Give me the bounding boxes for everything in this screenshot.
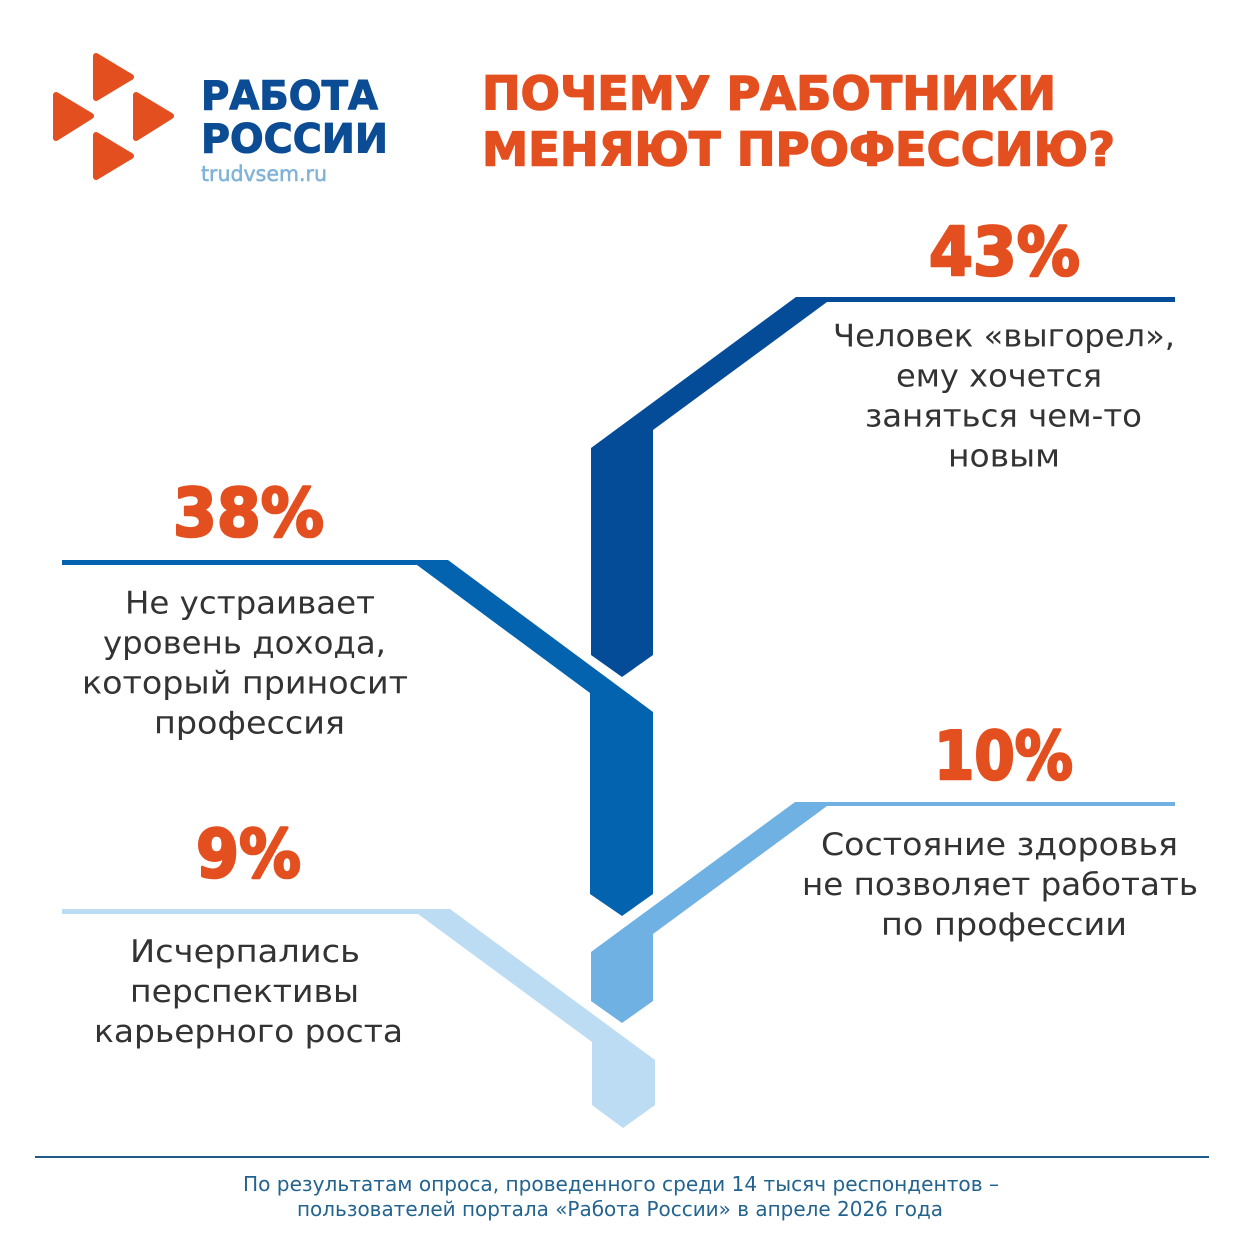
title	[482, 66, 1115, 176]
text: 10%: Состояние здоровья	[821, 827, 1178, 863]
text: 9%: перспективы	[130, 974, 359, 1010]
arrow: 10%	[591, 802, 1175, 1023]
text: 10%: по профессии	[881, 907, 1127, 943]
arrow: 38%	[62, 560, 653, 916]
icon: four orange triangles	[56, 56, 171, 177]
text: 38%: профессия	[154, 706, 345, 742]
text: 10%	[802, 827, 1198, 943]
text: 9%: Исчерпались	[130, 934, 360, 970]
arrow: 43%	[591, 297, 1175, 677]
logo wordmark: trudvsem.ru	[201, 162, 327, 186]
panel: 38%	[62, 474, 653, 916]
logo wordmark: РОССИИ	[201, 114, 388, 162]
logo wordmark	[201, 72, 388, 186]
text: 38%: Не устраивает	[125, 586, 375, 622]
text: 43%: ему хочется	[896, 358, 1102, 394]
title: МЕНЯЮТ ПРОФЕССИЮ?	[482, 122, 1115, 176]
text: 10%: не позволяет работать	[802, 867, 1198, 903]
footnote: пользователей портала «Работа России» в апреле 2026 года	[297, 1197, 943, 1221]
title: ПОЧЕМУ РАБОТНИКИ	[482, 66, 1056, 120]
logo wordmark: РАБОТА	[201, 72, 379, 120]
text: 38%: уровень дохода,	[103, 626, 386, 662]
panel: 10%	[591, 717, 1198, 1023]
text: 43%	[833, 318, 1175, 474]
text: 43%: заняться чем-то	[865, 398, 1142, 434]
text: 38%	[82, 586, 408, 742]
panel: 43%	[591, 213, 1175, 677]
value: 43%: 43%	[929, 213, 1080, 291]
text: 9%	[94, 934, 403, 1050]
footnote: По результатам опроса, проведенного среди 14 тысяч респондентов –	[243, 1172, 999, 1196]
text: 9%: карьерного роста	[94, 1014, 403, 1050]
text: 38%: который приносит	[82, 666, 408, 702]
logo	[56, 56, 388, 186]
value: 38%: 38%	[173, 474, 324, 552]
value: 9%: 9%	[196, 815, 301, 893]
text: 43%: Человек «выгорел»,	[833, 318, 1175, 354]
text: 43%: новым	[948, 438, 1060, 474]
arrow: 9%	[62, 909, 655, 1128]
panel: 9%	[62, 815, 655, 1128]
value: 10%: 10%	[934, 717, 1073, 795]
footnote	[243, 1172, 999, 1221]
